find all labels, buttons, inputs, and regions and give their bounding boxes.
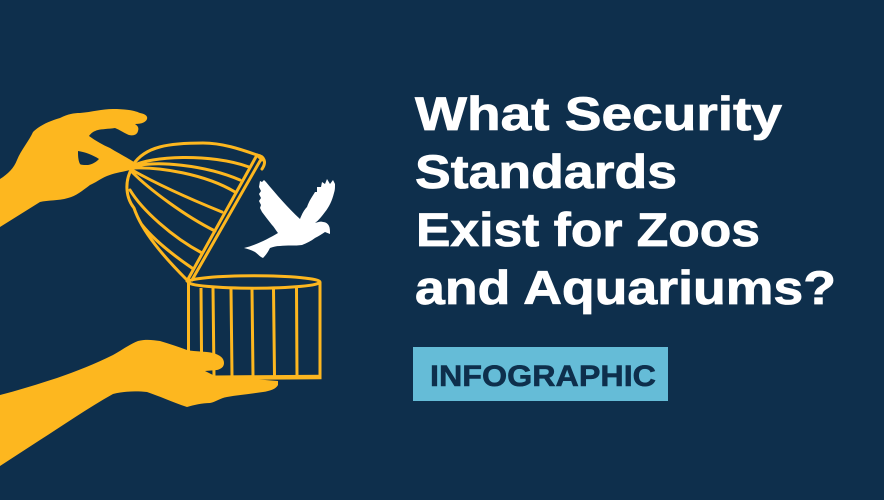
title: Standards xyxy=(415,146,677,199)
cage base bars xyxy=(201,288,297,376)
lid lower wires xyxy=(130,170,222,268)
icon: open cage lid xyxy=(127,143,264,281)
lid outer arc and hook xyxy=(133,143,264,169)
icon: cage base xyxy=(188,276,322,378)
title: and Aquariums? xyxy=(415,262,836,315)
lid upper wires xyxy=(133,157,249,192)
badge: infographic label xyxy=(413,347,668,401)
lid rim xyxy=(187,155,262,281)
badge: infographic label: INFOGRAPHIC xyxy=(430,360,656,393)
cage base floor xyxy=(215,375,322,380)
icon: upper hand lifting cage lid xyxy=(0,109,147,227)
title: Exist for Zoos xyxy=(416,204,760,257)
cage base walls xyxy=(188,282,320,378)
icon: dove xyxy=(244,179,335,258)
title: What Security xyxy=(415,88,783,141)
icon: lower hand holding cage xyxy=(0,340,278,466)
cage base rim xyxy=(188,276,320,288)
lid left arc xyxy=(127,168,187,280)
title xyxy=(415,88,836,315)
